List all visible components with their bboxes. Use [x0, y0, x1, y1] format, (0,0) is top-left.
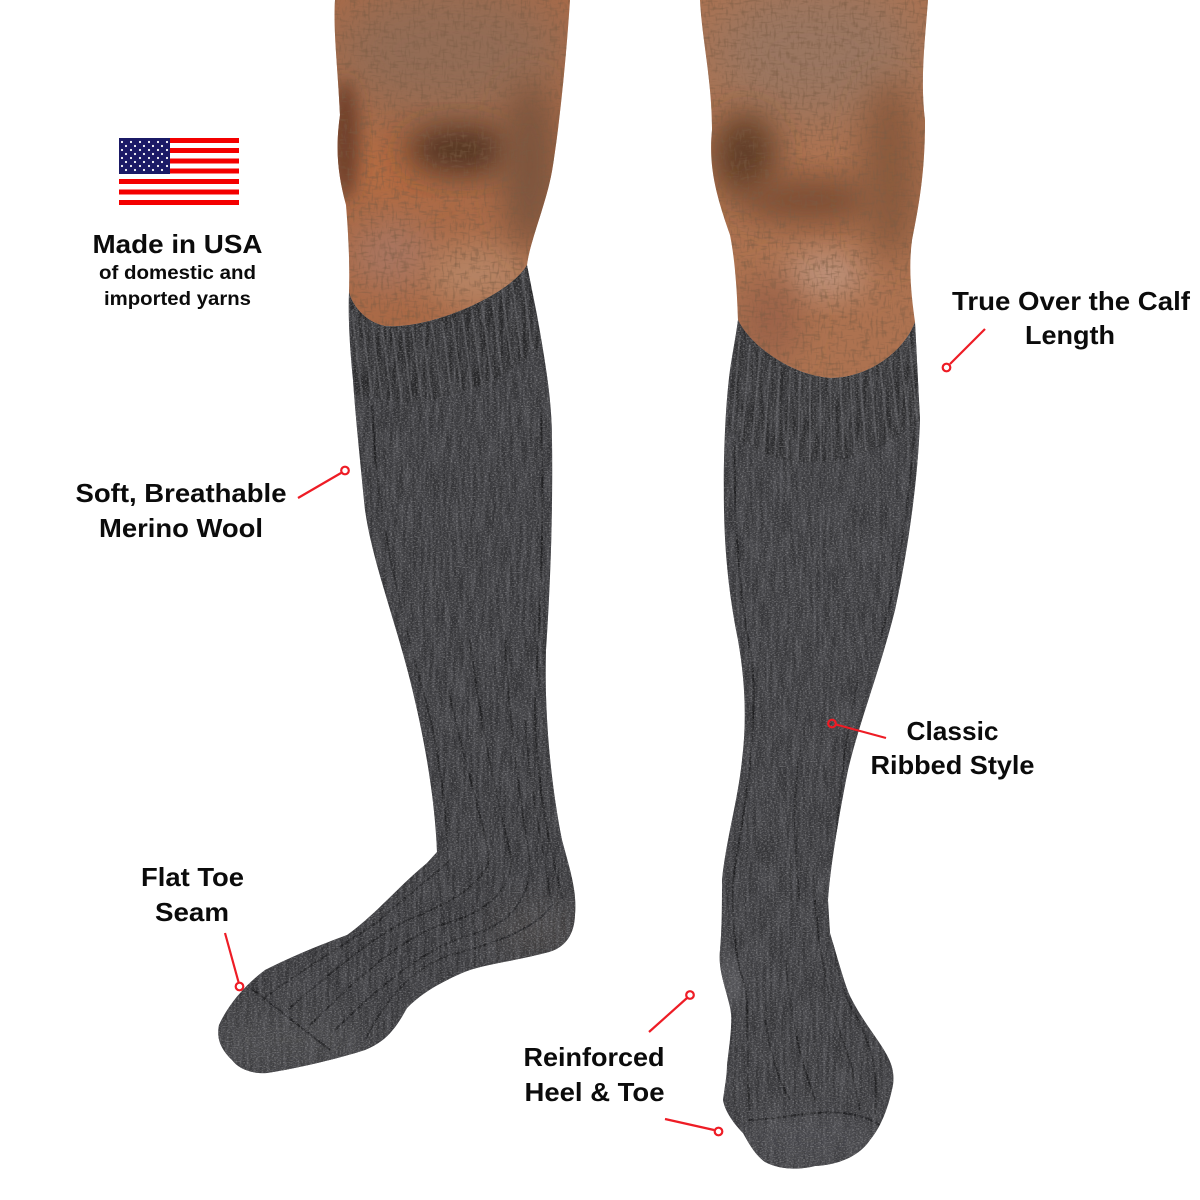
label: reinforced heel and toe	[524, 1042, 664, 1107]
callout pointer: ribbed style	[828, 720, 886, 738]
label: classic ribbed style	[870, 716, 1034, 780]
label: soft breathable merino wool	[76, 478, 286, 543]
right sock ribs	[733, 420, 915, 1125]
left sock	[218, 265, 576, 1074]
right sock cuff ribbing	[726, 320, 920, 462]
left sock knit texture	[218, 266, 576, 1074]
callout pointer: over the calf	[943, 329, 985, 371]
label: reinforced heel and toe: Heel & Toe	[524, 1077, 664, 1107]
label: flat toe seam: Seam	[155, 897, 229, 927]
label: classic ribbed style: Ribbed Style	[870, 750, 1034, 780]
left sock ribs	[247, 400, 563, 1050]
right leg skin	[695, 0, 935, 385]
label: true over the calf length: True Over the Calf	[952, 286, 1190, 316]
left leg skin	[334, 0, 570, 326]
callout pointer: toe	[665, 1119, 722, 1135]
label: true over the calf length: Length	[1025, 320, 1115, 350]
label: flat toe seam: Flat Toe	[141, 862, 244, 892]
callout pointer: merino wool	[298, 467, 349, 498]
callout pointer: flat toe seam	[225, 933, 243, 990]
right sock	[720, 320, 920, 1169]
label: reinforced heel and toe: Reinforced	[524, 1042, 664, 1072]
label: true over the calf length	[952, 286, 1190, 350]
text: of domestic and: of domestic and	[99, 263, 256, 284]
label: soft breathable merino wool: Soft, Breathable	[76, 478, 286, 508]
label: flat toe seam	[141, 862, 244, 927]
right sock knit texture	[720, 320, 920, 1168]
callout pointer: heel	[649, 991, 694, 1032]
label: soft breathable merino wool: Merino Wool	[99, 513, 263, 543]
text: made in USA: Made in USA	[92, 229, 263, 259]
text: imported yarns: imported yarns	[104, 289, 251, 310]
icon: American flag	[119, 138, 239, 205]
label: classic ribbed style: Classic	[906, 716, 998, 746]
left sock cuff ribbing	[349, 265, 542, 403]
